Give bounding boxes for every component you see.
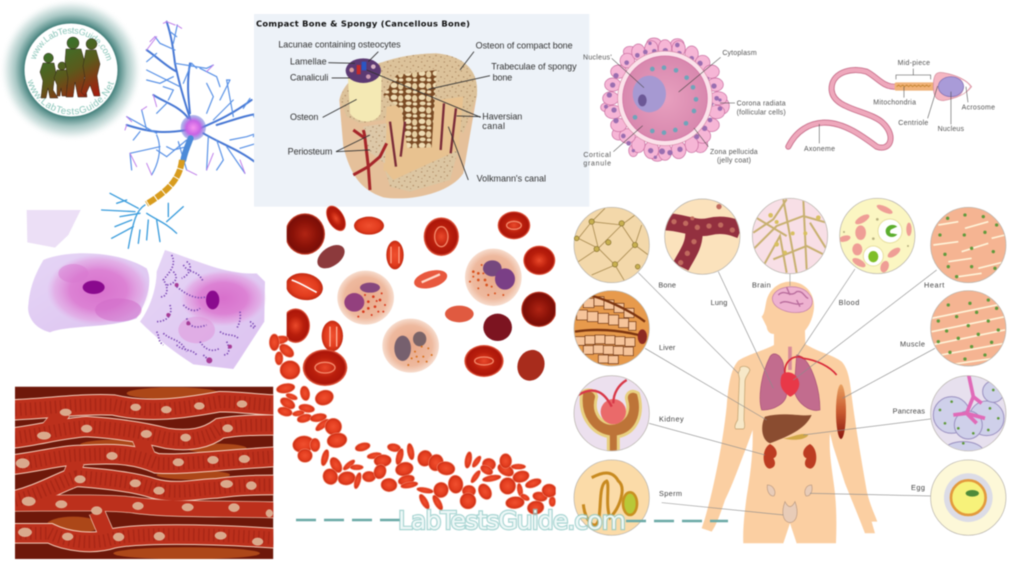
cell fragment xyxy=(27,210,81,248)
fibre striations xyxy=(10,402,277,542)
axon hillock xyxy=(183,138,191,160)
bone labels: Haversian xyxy=(482,112,522,122)
watermark text: LabTestsGuide.com xyxy=(398,506,626,535)
sperm labels: Centriole xyxy=(898,120,928,127)
circle: brain tissue xyxy=(752,198,828,274)
white blood cell one xyxy=(337,271,394,325)
dendrite tips xyxy=(125,22,260,175)
bone cylinder xyxy=(339,53,477,198)
background glow xyxy=(47,387,260,559)
logo: LabTestsGuide badge: www.LabTestsGuide.Net xyxy=(28,79,114,116)
corona nuclei xyxy=(604,42,722,159)
bone labels: Osteon xyxy=(290,112,318,122)
diagram: human body with tissues xyxy=(574,198,1006,543)
dendrites main xyxy=(127,22,260,163)
lungs xyxy=(760,354,820,410)
egg labels: Nucleus' xyxy=(583,54,612,61)
tissue labels: Muscle xyxy=(900,340,925,349)
left epithelial cell xyxy=(28,253,150,332)
zona pellucida xyxy=(618,51,712,146)
egg labels xyxy=(583,50,786,168)
bone labels: Trabeculae of spongy xyxy=(491,61,577,71)
circle: lung tissue xyxy=(664,199,741,274)
watermark text: LabTestsGuide.com xyxy=(398,506,626,535)
dashed divider line xyxy=(296,520,728,521)
bone labels: Lacunae containing osteocytes xyxy=(278,39,401,49)
osteon xyxy=(348,73,382,121)
circle: liver tissue xyxy=(574,291,649,366)
tissue labels: Heart xyxy=(924,280,944,289)
arm muscle xyxy=(836,384,846,439)
stream of small red cells xyxy=(269,334,558,516)
bone labels: Periosteum xyxy=(288,146,332,156)
circle: pancreas tissue xyxy=(931,373,1006,462)
reproductive organs xyxy=(767,485,812,523)
cell highlights xyxy=(292,221,521,373)
circle: sperm tissue xyxy=(574,460,649,535)
egg labels: Cytoplasm xyxy=(722,50,757,57)
bone labels xyxy=(256,19,577,183)
blood vessels xyxy=(353,130,387,190)
spongy bone xyxy=(383,70,437,148)
icon: neuron xyxy=(102,22,260,248)
circle: egg tissue xyxy=(931,460,1006,535)
tissue labels: Lung xyxy=(711,298,727,307)
body silhouette xyxy=(702,282,877,543)
fibre bodies xyxy=(10,402,277,542)
nuclei xyxy=(16,401,273,545)
sperm labels: Mid-piece xyxy=(898,60,930,67)
sperm labels xyxy=(804,60,995,153)
egg labels: (jelly coat) xyxy=(717,158,751,165)
corona cells xyxy=(601,38,729,161)
axon myelin xyxy=(147,160,182,204)
bone labels: canal xyxy=(482,121,505,131)
diagram: egg cell xyxy=(583,38,786,168)
tissue labels: Kidney xyxy=(659,415,684,424)
egg labels: (follicular cells) xyxy=(737,109,786,116)
leader lines xyxy=(638,269,937,515)
heart xyxy=(781,372,799,397)
micrograph: epithelial cells xyxy=(27,210,267,369)
cytoplasm xyxy=(623,56,707,141)
liver xyxy=(762,414,812,443)
cut face xyxy=(383,97,463,180)
tissue labels: Sperm xyxy=(659,489,682,498)
illustration: red and white blood cells xyxy=(269,202,558,516)
right epithelial cell xyxy=(140,250,267,369)
axon terminals xyxy=(102,193,183,248)
cortical granules xyxy=(633,65,698,135)
white blood cell three xyxy=(382,319,439,373)
mid-piece xyxy=(895,82,934,91)
circle: kidney tissue xyxy=(574,376,649,453)
tissue labels: Egg xyxy=(911,483,925,492)
circle: bone tissue xyxy=(574,207,649,283)
egg labels: granule xyxy=(583,161,611,168)
tissue labels: Brain xyxy=(752,280,771,289)
sperm leader lines xyxy=(819,69,968,143)
bone labels: Lamellae xyxy=(290,56,327,66)
circle: muscle tissue xyxy=(931,291,1006,366)
white blood cell two xyxy=(465,249,522,306)
nucleus xyxy=(633,76,666,112)
tail xyxy=(788,70,895,148)
tissue labels: Blood xyxy=(839,298,859,307)
logo: LabTestsGuide badge: www.LabTestsGuide.com xyxy=(30,27,112,62)
top compact surface xyxy=(340,53,477,133)
bone labels: Canaliculi xyxy=(290,72,328,82)
arm bone xyxy=(735,366,750,429)
egg labels: Corona radiata xyxy=(737,100,786,107)
trachea and vessels xyxy=(785,347,837,375)
sperm labels: Axoneme xyxy=(804,146,835,153)
kidneys xyxy=(764,444,816,469)
tissue labels: Bone xyxy=(658,280,676,289)
pancreas xyxy=(783,434,808,440)
fibre outlines xyxy=(10,402,277,542)
egg labels: Cortical xyxy=(583,152,611,159)
head xyxy=(933,72,972,101)
leader lines xyxy=(323,52,490,180)
bone labels: Osteon of compact bone xyxy=(476,41,573,51)
sperm labels: Acrosome xyxy=(962,104,995,111)
egg leader lines xyxy=(612,57,735,152)
logo: LabTestsGuide badge xyxy=(3,2,139,138)
micrograph: cardiac muscle fibres xyxy=(10,387,277,559)
brain xyxy=(772,287,812,313)
bone labels: Compact Bone & Spongy (Cancellous Bone) xyxy=(256,19,470,29)
circle: blood tissue xyxy=(838,198,915,274)
tissue labels: Liver xyxy=(659,343,676,352)
egg labels: Zona pellucida xyxy=(710,149,758,156)
tissue labels: Pancreas xyxy=(893,406,925,415)
dendrites fine xyxy=(127,25,258,175)
sperm labels: Mitochondria xyxy=(873,99,916,106)
soma xyxy=(181,115,206,140)
panel: compact and spongy bone diagram xyxy=(254,14,589,207)
bone labels: bone xyxy=(493,72,512,82)
circle: heart tissue xyxy=(931,207,1006,283)
bone labels: Volkmann's canal xyxy=(477,173,546,183)
diagram: sperm cell xyxy=(788,60,995,153)
large red blood cells xyxy=(281,202,557,386)
sperm labels: Nucleus xyxy=(938,126,964,133)
tissue labels xyxy=(658,280,944,498)
